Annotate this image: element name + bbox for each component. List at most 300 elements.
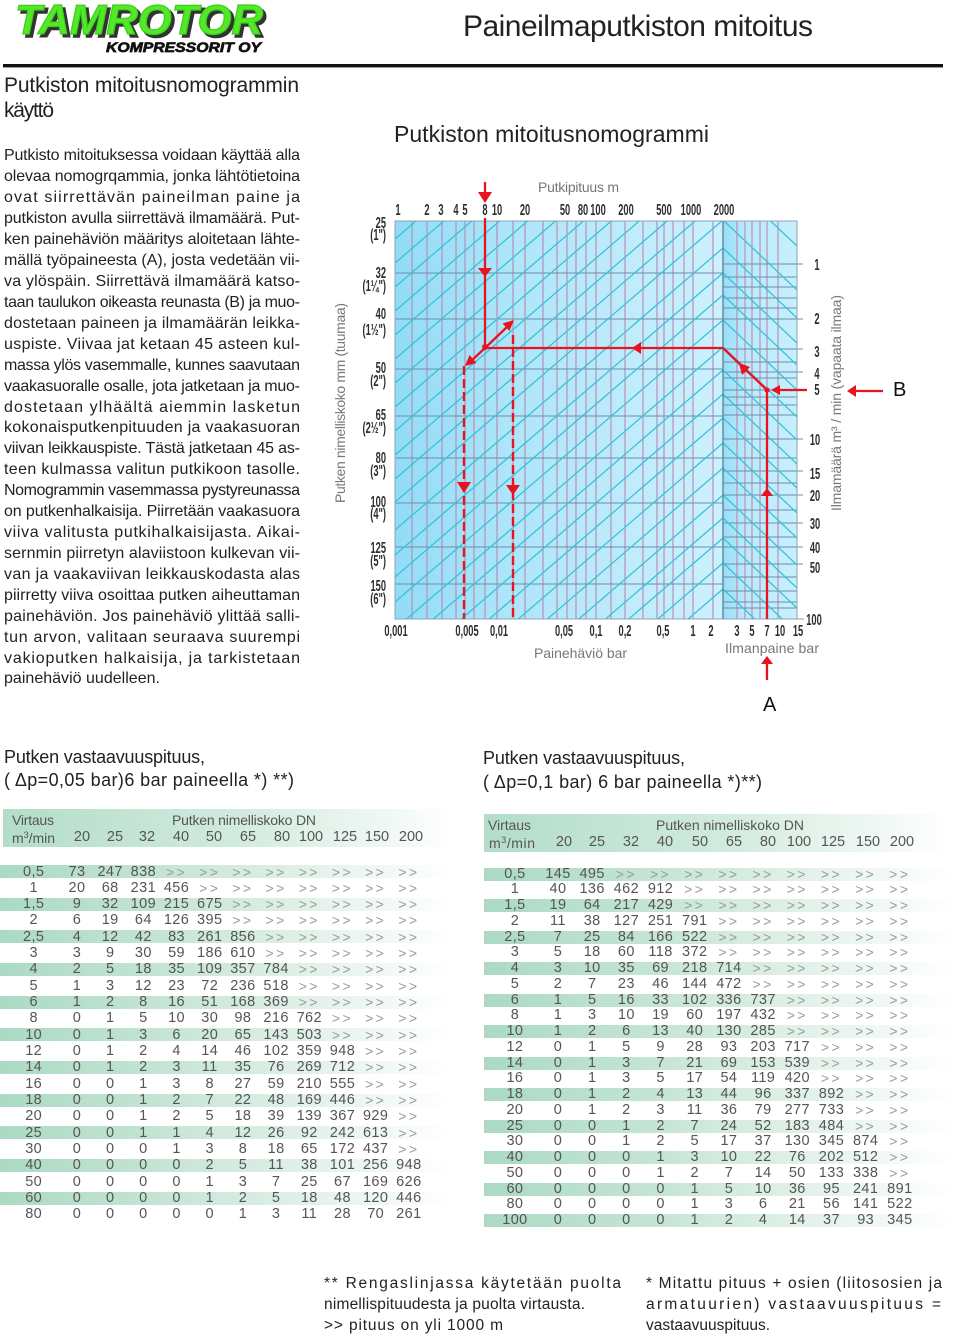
table: equivalent length at 0,05 bar: 20 — [25, 1108, 42, 1124]
table: equivalent length at 0,05 bar: 4 — [73, 929, 81, 945]
left axis labels: pipe size: (1¼") — [362, 276, 386, 295]
table: equivalent length at 0,1 bar: 1,5 — [504, 897, 526, 913]
table: equivalent length at 0,05 bar: >> — [398, 1141, 419, 1157]
top axis labels: 2000 — [714, 200, 734, 219]
table: equivalent length at 0,05 bar: 30 — [135, 945, 152, 961]
table: equivalent length at 0,1 bar: >> — [889, 1086, 910, 1102]
bottom axis labels: 7 — [764, 621, 770, 640]
table: equivalent length at 0,1 bar: 522 — [887, 1196, 913, 1212]
table: equivalent length at 0,1 bar: 69 — [652, 960, 669, 976]
table: equivalent length at 0,1 bar: 102 — [682, 992, 707, 1008]
table: equivalent length at 0,05 bar: 247 — [97, 864, 123, 880]
table: equivalent length at 0,1 bar: >> — [753, 866, 774, 882]
table: equivalent length at 0,1 bar: 30 — [506, 1133, 523, 1149]
table: equivalent length at 0,05 bar: 0 — [73, 1206, 81, 1222]
table: equivalent length at 0,05 bar: 7 — [206, 1092, 214, 1108]
table: equivalent length at 0,1 bar: >> — [821, 944, 842, 960]
footnote: ring line — [324, 1275, 621, 1334]
table: equivalent length at 0,1 bar: >> — [889, 913, 910, 929]
table: equivalent length at 0,05 bar: >> — [299, 994, 320, 1010]
table: equivalent length at 0,1 bar: 0 — [588, 1118, 596, 1134]
text block: instructions: tun arvon, valitaan seuraava suurempi — [4, 629, 300, 646]
table: equivalent length at 0,1 bar: >> — [855, 1039, 876, 1055]
table: equivalent length at 0,1 bar: >> — [889, 1039, 910, 1055]
bottom axis labels: 0,5 — [657, 621, 669, 640]
table: equivalent length at 0,1 bar: >> — [718, 944, 740, 960]
table: equivalent length at 0,1 bar: >> — [855, 1055, 876, 1071]
top axis labels: 80 — [578, 200, 588, 219]
table: equivalent length at 0,1 bar: 512 — [853, 1149, 878, 1165]
table: equivalent length at 0,1 bar: 35 — [618, 960, 635, 976]
right table header: 80 — [760, 834, 776, 850]
table: equivalent length at 0,1 bar: 16 — [618, 992, 635, 1008]
table: equivalent length at 0,05 bar: 12 — [102, 929, 119, 945]
callout label B: B — [893, 379, 906, 401]
table: equivalent length at 0,1 bar: >> — [889, 1133, 910, 1149]
table: equivalent length at 0,1 bar: 0 — [588, 1181, 596, 1197]
top axis labels: 5 — [462, 200, 468, 219]
table: equivalent length at 0,05 bar: 1 — [139, 1108, 148, 1124]
right table header: /min — [507, 835, 535, 851]
table: equivalent length at 0,05 bar: 1 — [206, 1190, 214, 1206]
table: equivalent length at 0,1 bar: 0 — [588, 1133, 596, 1149]
table: equivalent length at 0,1 bar: 3 — [622, 1070, 631, 1086]
table: equivalent length at 0,05 bar: 18 — [234, 1108, 251, 1124]
table: equivalent length at 0,05 bar: 59 — [168, 945, 185, 961]
table: equivalent length at 0,05 bar: >> — [332, 945, 353, 961]
table: equivalent length at 0,1 bar: 0 — [622, 1149, 631, 1165]
table: equivalent length at 0,05 bar: 102 — [263, 1043, 289, 1059]
table: equivalent length at 0,1 bar: 3 — [588, 1007, 596, 1023]
table: equivalent length at 0,05 bar: 14 — [201, 1043, 218, 1059]
table: equivalent length at 0,1 bar: 136 — [579, 881, 605, 897]
table: equivalent length at 0,05 bar: 120 — [363, 1190, 388, 1206]
table: equivalent length at 0,05 bar: 168 — [230, 994, 256, 1010]
table: equivalent length at 0,1 bar: 21 — [686, 1055, 703, 1071]
table: equivalent length at 0,1 bar: 20 — [506, 1102, 523, 1118]
table: equivalent length at 0,1 bar: 17 — [686, 1070, 703, 1086]
table: equivalent length at 0,05 bar: 2 — [73, 961, 81, 977]
table: equivalent length at 0,05 bar: 395 — [197, 912, 222, 928]
table: equivalent length at 0,1 bar: 6 — [622, 1023, 631, 1039]
table: equivalent length at 0,1 bar: 1 — [511, 881, 519, 897]
left axis labels: pipe size: 65 — [376, 405, 386, 424]
red arrowheads — [457, 192, 856, 664]
right table header: 50 — [692, 834, 708, 850]
table: equivalent length at 0,05 bar: >> — [365, 1092, 386, 1108]
table: equivalent length at 0,05 bar: >> — [365, 961, 386, 977]
table: equivalent length at 0,1 bar: 100 — [502, 1212, 528, 1228]
table: equivalent length at 0,1 bar: 285 — [750, 1023, 776, 1039]
table: equivalent length at 0,05 bar: >> — [365, 1076, 386, 1092]
table: equivalent length at 0,05 bar: 0 — [172, 1190, 181, 1206]
top axis labels: 200 — [618, 200, 634, 219]
table: equivalent length at 0,1 bar: 0 — [554, 1165, 562, 1181]
table: equivalent length at 0,1 bar: 9 — [656, 1039, 665, 1055]
table: equivalent length at 0,1 bar: >> — [855, 913, 876, 929]
table: equivalent length at 0,05 bar: 1 — [172, 1141, 181, 1157]
top axis labels: 50 — [560, 200, 570, 219]
table: equivalent length at 0,1 bar: >> — [753, 976, 774, 992]
table: equivalent length at 0,1 bar: 0 — [554, 1102, 562, 1118]
table: equivalent length at 0,1 bar: >> — [753, 929, 774, 945]
table: equivalent length at 0,05 bar: >> — [199, 880, 220, 896]
table: equivalent length at 0,05 bar: 610 — [230, 945, 256, 961]
table: equivalent length at 0,05 bar: 18 — [135, 961, 152, 977]
table: equivalent length at 0,05 bar: 1 — [73, 978, 81, 994]
table: equivalent length at 0,05 bar: >> — [398, 945, 419, 961]
table: equivalent length at 0,05 bar: >> — [398, 880, 419, 896]
table: equivalent length at 0,1 bar: 12 — [506, 1039, 523, 1055]
table: equivalent length at 0,05 bar: >> — [365, 864, 386, 880]
table: equivalent length at 0,1 bar: >> — [855, 1070, 876, 1086]
table: equivalent length at 0,1 bar: 4 — [511, 960, 519, 976]
text block: instructions: viiva valitusta putkihalkaisijasta. Aikai- — [4, 524, 300, 541]
text block: instructions: on putkenhalkaisija. Piirretään vaakasuora — [4, 503, 300, 520]
table: equivalent length at 0,1 bar: 0,5 — [504, 866, 526, 882]
heading: nomogram: Putkiston mitoitusnomogrammi — [394, 121, 709, 147]
table: equivalent length at 0,1 bar: 46 — [652, 976, 669, 992]
table: equivalent length at 0,1 bar: 10 — [506, 1023, 523, 1039]
top axis labels: 2 — [424, 200, 430, 219]
left axis labels: pipe size: (6") — [370, 589, 386, 608]
table: equivalent length at 0,05 bar: 0 — [106, 1174, 114, 1190]
table: equivalent length at 0,05 bar: 19 — [102, 912, 119, 928]
right axis labels: air volume: 1 — [814, 255, 820, 274]
table: equivalent length at 0,05 bar: >> — [299, 864, 320, 880]
table: equivalent length at 0,1 bar: 130 — [716, 1023, 742, 1039]
table: equivalent length at 0,05 bar: 70 — [367, 1206, 384, 1222]
table: equivalent length at 0,05 bar: 0 — [106, 1108, 114, 1124]
table: equivalent length at 0,1 bar: >> — [889, 1007, 910, 1023]
table: equivalent length at 0,05 bar: 26 — [268, 1125, 285, 1141]
bottom axis labels: 0,001 — [384, 621, 408, 640]
right table header: 150 — [856, 834, 880, 850]
table: equivalent length at 0,1 bar: >> — [650, 866, 671, 882]
table: equivalent length at 0,05 bar: 0 — [73, 1141, 81, 1157]
table: equivalent length at 0,1 bar: 484 — [819, 1118, 844, 1134]
table: equivalent length at 0,05 bar: 76 — [268, 1059, 285, 1075]
table: equivalent length at 0,1 bar: 4 — [656, 1086, 665, 1102]
table: equivalent length at 0,1 bar: >> — [821, 1023, 842, 1039]
table: equivalent length at 0,1 bar: >> — [889, 1149, 910, 1165]
table: equivalent length at 0,1 bar: 0 — [622, 1165, 631, 1181]
table: equivalent length at 0,05 bar: >> — [232, 864, 254, 880]
table: equivalent length at 0,05 bar: 126 — [164, 912, 189, 928]
table: equivalent length at 0,1 bar: 44 — [720, 1086, 737, 1102]
table: equivalent length at 0,1 bar: 336 — [716, 992, 742, 1008]
table: equivalent length at 0,05 bar: 0,5 — [23, 864, 44, 880]
table: equivalent length at 0,1 bar: 5 — [656, 1070, 665, 1086]
table: equivalent length at 0,05 bar: >> — [365, 929, 386, 945]
bottom axis labels: 15 — [793, 621, 803, 640]
table: equivalent length at 0,1 bar: 0 — [588, 1196, 596, 1212]
top axis labels: 10 — [492, 200, 502, 219]
table: equivalent length at 0,05 bar: 25 — [301, 1174, 318, 1190]
table: equivalent length at 0,05 bar: 48 — [334, 1190, 351, 1206]
right table header: 20 — [556, 834, 572, 850]
table: equivalent length at 0,1 bar: 0 — [554, 1055, 562, 1071]
left axis labels: pipe size — [362, 213, 386, 608]
table: equivalent length at 0,1 bar: 22 — [755, 1149, 772, 1165]
table: equivalent length at 0,05 bar: 1 — [106, 1059, 114, 1075]
table: equivalent length at 0,1 bar: 40 — [550, 881, 566, 897]
logo: Tamrotor Kompressorit Oy: KOMPRESSORIT OY — [106, 39, 263, 55]
table: equivalent length at 0,05 bar: 14 — [25, 1059, 42, 1075]
table: equivalent length at 0,05 bar: 0 — [172, 1157, 181, 1173]
table: equivalent length at 0,05 bar: 11 — [268, 1157, 284, 1173]
table: equivalent length at 0,1 bar: 96 — [755, 1086, 772, 1102]
footnote: measured length: armatuurien) vastaavuuspituus = — [646, 1296, 941, 1313]
table: equivalent length at 0,05 bar: 72 — [201, 978, 218, 994]
table: equivalent length at 0,1 bar: 6 — [511, 992, 519, 1008]
table: equivalent length at 0,05 bar: 80 — [25, 1206, 42, 1222]
table: equivalent length at 0,1 bar: 17 — [720, 1133, 737, 1149]
text block: instructions: van ja vaakaviivan leikkauskodasta alas — [4, 566, 300, 583]
table: equivalent length at 0,05 bar: 712 — [330, 1059, 355, 1075]
right axis labels: air volume: 10 — [810, 430, 820, 449]
table: equivalent length at 0,1 bar: 3 — [554, 960, 562, 976]
right table header: Putken nimelliskoko DN — [656, 817, 804, 833]
table: equivalent length at 0,05 bar: 2 — [29, 912, 38, 928]
table: equivalent length at 0,1 bar: 203 — [750, 1039, 776, 1055]
table: equivalent length at 0,1 bar: 76 — [789, 1149, 806, 1165]
table: equivalent length at 0,1 bar: 19 — [652, 1007, 669, 1023]
table: equivalent length at 0,1 bar: 1 — [656, 1165, 665, 1181]
left table header: Virtaus — [12, 812, 54, 828]
table: equivalent length at 0,05 bar: 446 — [330, 1092, 355, 1108]
table: equivalent length at 0,1 bar: 5 — [511, 976, 519, 992]
table: equivalent length at 0,05 bar: >> — [365, 896, 386, 912]
table: equivalent length at 0,1 bar: >> — [889, 944, 910, 960]
table: equivalent length at 0,05 bar: >> — [398, 994, 419, 1010]
table: equivalent length at 0,1 bar: 1 — [588, 1102, 596, 1118]
table: equivalent length at 0,05 bar: 0 — [172, 1206, 181, 1222]
left axis labels: pipe size: (5") — [370, 551, 386, 570]
table: equivalent length at 0,1 bar: 472 — [716, 976, 742, 992]
table: equivalent length at 0,05 bar: 40 — [25, 1157, 42, 1173]
bottom axis labels: 0,05 — [555, 621, 573, 640]
table: equivalent length at 0,05 bar: >> — [266, 929, 287, 945]
text block: instructions: vakioputken halkaisija, ja tarkistetaan — [4, 650, 300, 667]
top axis labels: 500 — [656, 200, 672, 219]
right axis labels: air volume: 30 — [810, 514, 820, 533]
table: equivalent length at 0,1 bar: 37 — [823, 1212, 840, 1228]
table: equivalent length at 0,05 bar: 1,5 — [23, 896, 44, 912]
bottom axis labels: 0,01 — [490, 621, 508, 640]
table: equivalent length at 0,05 bar: 626 — [396, 1174, 422, 1190]
table: equivalent length at 0,05 bar: 1 — [139, 1092, 148, 1108]
table: equivalent length at 0,1 bar: 145 — [545, 866, 571, 882]
table: equivalent length at 0,05 bar: >> — [232, 880, 254, 896]
table: equivalent length at 0,1 bar: 0 — [554, 1133, 562, 1149]
table: equivalent length at 0,1 bar: 8 — [511, 1007, 519, 1023]
left table header: 150 — [365, 829, 389, 845]
table: equivalent length at 0,05 bar: >> — [266, 880, 287, 896]
table: equivalent length at 0,05 bar: 6 — [172, 1027, 181, 1043]
table: equivalent length at 0,05 bar: 357 — [230, 961, 256, 977]
right table header: 100 — [787, 834, 811, 850]
table: equivalent length at 0,1 bar: 1 — [690, 1196, 699, 1212]
text block: instructions: kokonaisputkenpituuden ja vaakasuoran — [4, 419, 300, 436]
table: equivalent length at 0,1 bar: 18 — [584, 944, 601, 960]
table: equivalent length at 0,1 bar: >> — [718, 881, 740, 897]
table: equivalent length at 0,1 bar: 0 — [656, 1181, 665, 1197]
bottom axis labels: 10 — [775, 621, 785, 640]
table: equivalent length at 0,1 bar: 7 — [588, 976, 596, 992]
table: equivalent length at 0,05 bar: 7 — [272, 1174, 280, 1190]
table: equivalent length at 0,1 bar: 0 — [554, 1149, 562, 1165]
table: equivalent length at 0,05 bar: 5 — [106, 961, 114, 977]
table: equivalent length at 0,1 bar: 522 — [682, 929, 707, 945]
table: equivalent length at 0,05 bar: 216 — [263, 1010, 289, 1026]
table: equivalent length at 0,1 bar: >> — [889, 1102, 910, 1118]
table: equivalent length at 0,05 bar: 51 — [201, 994, 218, 1010]
table: equivalent length at 0,05 bar: >> — [398, 1092, 419, 1108]
table: equivalent length at 0,1 bar: 1 — [622, 1133, 631, 1149]
table: equivalent length at 0,05 bar: 8 — [239, 1141, 247, 1157]
table: equivalent length at 0,05 bar: 98 — [234, 1010, 251, 1026]
table: equivalent length at 0,05 bar: >> — [332, 978, 353, 994]
left axis labels: pipe size: 150 — [370, 576, 386, 595]
table: equivalent length at 0,05 bar: 30 — [25, 1141, 42, 1157]
table: equivalent length at 0,05 bar: 929 — [363, 1108, 388, 1124]
table: equivalent length at 0,05 bar: 5 — [139, 1010, 148, 1026]
right table header: 3 — [501, 835, 506, 845]
bottom axis labels: 0,1 — [590, 621, 602, 640]
table: equivalent length at 0,1 bar: 2 — [622, 1102, 631, 1118]
table: equivalent length at 0,05 bar: 215 — [164, 896, 189, 912]
table: equivalent length at 0,1 bar: 717 — [785, 1039, 810, 1055]
table: equivalent length at 0,1 bar: >> — [787, 944, 808, 960]
table: equivalent length at 0,1 bar: >> — [821, 992, 842, 1008]
table: equivalent length at 0,05 bar: 0 — [73, 1043, 81, 1059]
table: equivalent length at 0,05 bar: 0 — [73, 1174, 81, 1190]
table: equivalent length at 0,05 bar: >> — [365, 1043, 386, 1059]
table: equivalent length at 0,1 bar: >> — [753, 897, 774, 913]
table: equivalent length at 0,1 bar: 874 — [853, 1133, 878, 1149]
table: equivalent length at 0,1 bar: 95 — [823, 1181, 840, 1197]
table: equivalent length at 0,05 bar: >> — [266, 945, 287, 961]
table: equivalent length at 0,1 bar: 0 — [554, 1196, 562, 1212]
right table header — [484, 814, 950, 852]
table: equivalent length at 0,05 bar: >> — [299, 896, 320, 912]
table: equivalent length at 0,1 bar: 737 — [750, 992, 776, 1008]
table: equivalent length at 0,1 bar: >> — [787, 976, 808, 992]
table: equivalent length at 0,1 bar: >> — [821, 929, 842, 945]
text block: instructions: mällä työpaineesta (A), josta vedetään vii- — [4, 252, 300, 269]
table: equivalent length at 0,1 bar: 36 — [789, 1181, 806, 1197]
diagonal lines: main field — [396, 222, 722, 618]
table: equivalent length at 0,05 bar: >> — [398, 1108, 419, 1124]
table: equivalent length at 0,1 bar: 337 — [785, 1086, 810, 1102]
table: equivalent length at 0,1 bar: >> — [889, 929, 910, 945]
table: equivalent length at 0,1 bar: 0 — [656, 1196, 665, 1212]
table: equivalent length at 0,05 bar: >> — [398, 896, 419, 912]
table: equivalent length at 0,1 bar: >> — [718, 897, 740, 913]
table: equivalent length at 0,05 bar: 169 — [297, 1092, 322, 1108]
table: equivalent length at 0,05 bar: 28 — [334, 1206, 351, 1222]
table: equivalent length at 0,05 bar: 1 — [139, 1125, 148, 1141]
table: equivalent length at 0,1 bar: 50 — [506, 1165, 523, 1181]
table: equivalent length at 0,1 bar: 119 — [751, 1070, 775, 1086]
left axis labels: pipe size: 25 — [376, 213, 386, 232]
table: equivalent length at 0,05 bar: 446 — [396, 1190, 422, 1206]
table: equivalent length at 0,1 bar: >> — [787, 866, 808, 882]
table: equivalent length at 0,1 bar: 7 — [690, 1118, 699, 1134]
heading: left table — [4, 747, 294, 790]
grid: pipe size horizontals — [395, 264, 803, 608]
table: equivalent length at 0,1 bar: >> — [855, 1102, 876, 1118]
footnote: measured length: vastaavuuspituus. — [646, 1317, 770, 1334]
table: equivalent length at 0,1 bar: >> — [855, 1007, 876, 1023]
table: equivalent length at 0,1 bar: 495 — [579, 866, 605, 882]
table: equivalent length at 0,05 bar: >> — [332, 929, 353, 945]
table: equivalent length at 0,1 bar: 33 — [652, 992, 669, 1008]
table: equivalent length at 0,05 bar: 437 — [363, 1141, 388, 1157]
left axis labels: pipe size: (1½") — [362, 320, 386, 339]
table: equivalent length at 0,05 bar: 242 — [330, 1125, 355, 1141]
table: equivalent length at 0,05 bar: 30 — [201, 1010, 218, 1026]
table: equivalent length at 0,05 bar: 0 — [139, 1206, 148, 1222]
table: equivalent length at 0,1 bar: >> — [787, 1007, 808, 1023]
table: equivalent length at 0,05 bar: >> — [398, 978, 419, 994]
table: equivalent length at 0,1 bar: >> — [855, 1023, 876, 1039]
table: equivalent length at 0,1 bar: 3 — [725, 1196, 733, 1212]
table: equivalent length at 0,05 bar: 2 — [139, 1043, 148, 1059]
table: equivalent length at 0,05 bar: 0 — [73, 1076, 81, 1092]
table: equivalent length at 0,05 bar: 12 — [25, 1043, 42, 1059]
table: equivalent length at 0,1 bar: 38 — [584, 913, 601, 929]
table: equivalent length at 0,05 bar: 59 — [268, 1076, 285, 1092]
right axis labels: air volume: 15 — [810, 464, 820, 483]
table: equivalent length at 0,1 bar: 60 — [686, 1007, 703, 1023]
bottom axis labels: 3 — [734, 621, 740, 640]
table: equivalent length at 0,1 bar: 118 — [648, 944, 673, 960]
table: equivalent length at 0,05 bar: 675 — [197, 896, 222, 912]
table: equivalent length at 0,1 bar: >> — [889, 881, 910, 897]
table: equivalent length at 0,1 bar: 10 — [755, 1181, 772, 1197]
table: equivalent length at 0,1 bar: 166 — [648, 929, 673, 945]
table: equivalent length at 0,05 bar: 4 — [206, 1125, 214, 1141]
table: equivalent length at 0,05 bar: 261 — [197, 929, 222, 945]
table: equivalent length at 0,05 bar: 65 — [301, 1141, 318, 1157]
table: equivalent length at 0,05 bar: 60 — [25, 1190, 42, 1206]
heading: left table: ( Δp=0,05 bar)6 bar paineella *) **) — [4, 770, 294, 790]
table: equivalent length at 0,1 bar: 0 — [554, 1070, 562, 1086]
left table header: 3 — [24, 830, 29, 840]
table: equivalent length at 0,05 bar: >> — [299, 880, 320, 896]
table: equivalent length at 0,05 bar: >> — [398, 864, 419, 880]
table: equivalent length at 0,05 bar: 948 — [330, 1043, 355, 1059]
table: equivalent length at 0,05 bar: 0 — [139, 1174, 148, 1190]
table: equivalent length at 0,05 bar: 5 — [206, 1108, 214, 1124]
table: equivalent length at 0,1 bar: >> — [889, 1118, 910, 1134]
right table header: 32 — [623, 834, 639, 850]
table: equivalent length at 0,1 bar: 18 — [506, 1086, 523, 1102]
table: equivalent length at 0,05 bar: >> — [398, 1076, 419, 1092]
table: equivalent length at 0,05 bar: 8 — [206, 1076, 214, 1092]
text block: instructions: painehäviön. Jos painehäviö ylittää salli- — [4, 608, 300, 625]
text block: instructions: vaakasuoralle osalle, jota jatketaan ja muo- — [4, 378, 300, 395]
table: equivalent length at 0,05 bar: >> — [398, 912, 419, 928]
table: equivalent length at 0,1 bar: 13 — [686, 1086, 703, 1102]
right axis labels: air volume: 5 — [814, 380, 820, 399]
table: equivalent length at 0,1 bar: >> — [787, 929, 808, 945]
table: equivalent length at 0,05 bar: 5 — [29, 978, 38, 994]
table: equivalent length at 0,05 bar: 369 — [263, 994, 289, 1010]
top axis labels: 1 — [395, 200, 401, 219]
